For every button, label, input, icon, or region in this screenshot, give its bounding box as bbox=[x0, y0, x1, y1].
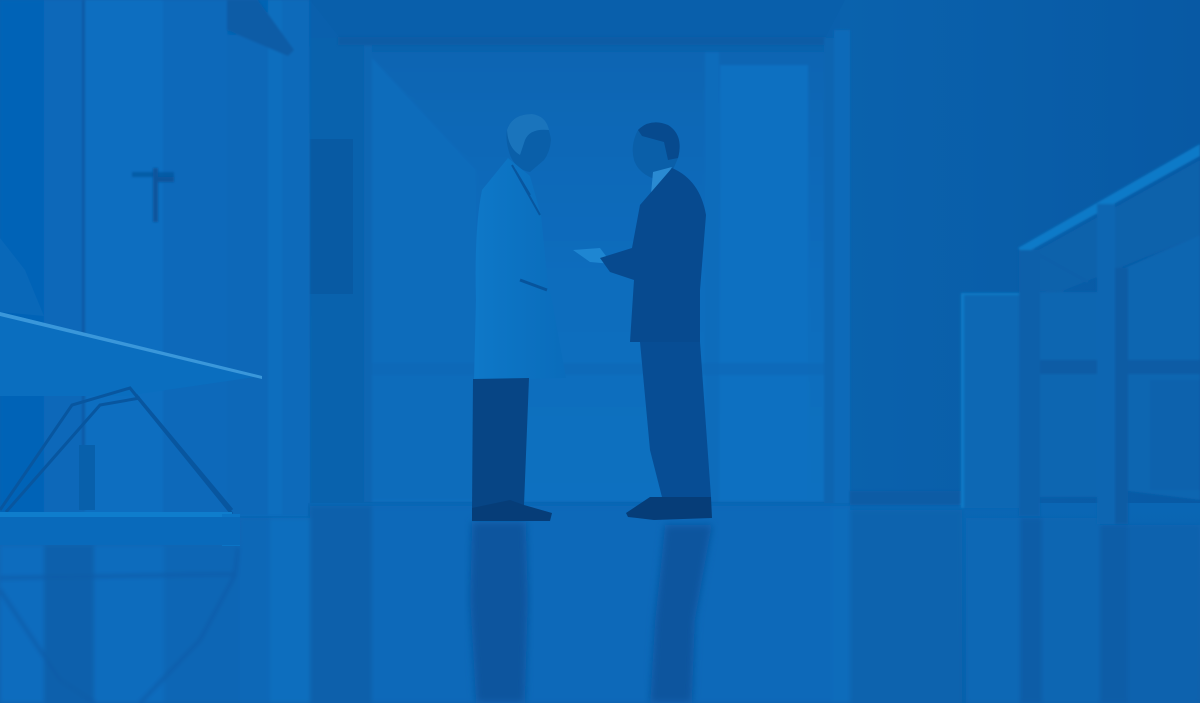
reflection of doctor bbox=[470, 522, 528, 703]
door handle bbox=[132, 168, 174, 222]
left wall and door bbox=[0, 0, 310, 530]
man suit jacket bbox=[600, 168, 706, 342]
doctor white coat bbox=[474, 158, 566, 380]
doctor trousers bbox=[472, 378, 529, 512]
doctor shoes bbox=[472, 500, 552, 521]
man shoes bbox=[626, 497, 712, 520]
reflection of businessman bbox=[650, 525, 712, 703]
bench bbox=[0, 238, 262, 546]
doctor head bbox=[506, 114, 551, 172]
man head bbox=[633, 122, 680, 178]
window bbox=[338, 30, 850, 504]
central back wall bbox=[308, 38, 843, 505]
right railing and glass bbox=[850, 144, 1200, 524]
right wall bbox=[840, 0, 1200, 505]
doctor bbox=[472, 114, 566, 521]
tablet bbox=[573, 248, 612, 264]
man shirt bbox=[650, 167, 672, 205]
floor reflections bbox=[0, 506, 1200, 703]
man trousers bbox=[640, 342, 711, 505]
businessman bbox=[573, 122, 712, 520]
ceiling bbox=[310, 0, 845, 38]
dark wall panel bbox=[309, 139, 353, 294]
floor bbox=[0, 503, 1200, 703]
